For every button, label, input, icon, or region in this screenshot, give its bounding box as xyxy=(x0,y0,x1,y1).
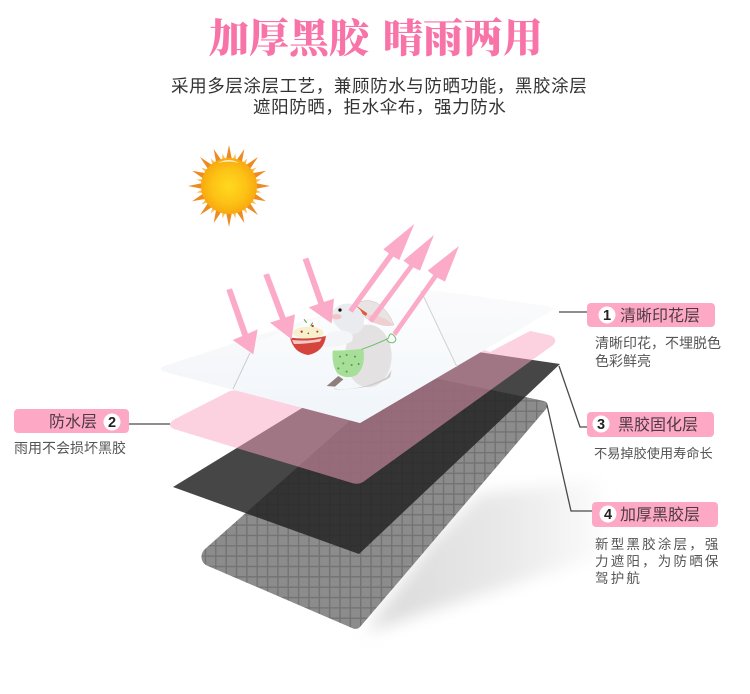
label 3: black fixing layer: 黑胶固化层 xyxy=(618,416,698,434)
description 1: 清晰印花，不埋脱色 xyxy=(595,335,721,351)
description 2: 雨用不会损坏黑胶 xyxy=(14,440,126,456)
illustration: bunny with bowl xyxy=(290,300,396,389)
icon: sun xyxy=(188,145,270,227)
title: 晴雨两用 xyxy=(383,16,543,61)
layer 3: black fixing layer xyxy=(173,342,560,554)
label 3: black fixing layer xyxy=(587,412,714,437)
description 4: 驾护航 xyxy=(595,571,642,586)
layer 2: pink waterproof layer xyxy=(170,331,555,484)
arrows: sunlight reflected up xyxy=(348,224,459,336)
label 1: clear print layer: 1 xyxy=(603,308,611,324)
description 1: 色彩鲜亮 xyxy=(595,353,651,369)
subtitle text xyxy=(171,76,587,117)
label 4: thick black coating: 4 xyxy=(604,507,612,523)
label 4: thick black coating xyxy=(592,502,718,527)
description 4: 新型黑胶涂层，强 xyxy=(595,536,721,552)
description 1 xyxy=(595,335,721,369)
label 2: waterproof layer: 防水层 xyxy=(49,413,97,431)
arrows: sunlight coming down xyxy=(226,258,334,354)
layer 1: white print layer xyxy=(161,287,553,423)
label 1: clear print layer xyxy=(587,303,715,327)
connector lines xyxy=(129,312,592,511)
title: 加厚黑胶 xyxy=(209,16,373,61)
description 4: 力遮阳，为防晒保 xyxy=(595,554,721,569)
label 2: waterproof layer xyxy=(14,409,129,433)
label 1: clear print layer: 清晰印花层 xyxy=(620,307,700,325)
subtitle text: 遮阳防晒，拒水伞布，强力防水 xyxy=(253,97,506,117)
label 2: waterproof layer: 2 xyxy=(108,415,116,431)
layer 4: thick black coating (grey grid) xyxy=(201,372,548,629)
layer shadow xyxy=(366,480,600,632)
label 3: black fixing layer: 3 xyxy=(597,417,605,433)
label 4: thick black coating: 加厚黑胶层 xyxy=(620,506,700,524)
subtitle text: 采用多层涂层工艺，兼顾防水与防晒功能，黑胶涂层 xyxy=(171,76,587,96)
description 4 xyxy=(595,536,721,586)
description 3: 不易掉胶使用寿命长 xyxy=(594,445,713,461)
